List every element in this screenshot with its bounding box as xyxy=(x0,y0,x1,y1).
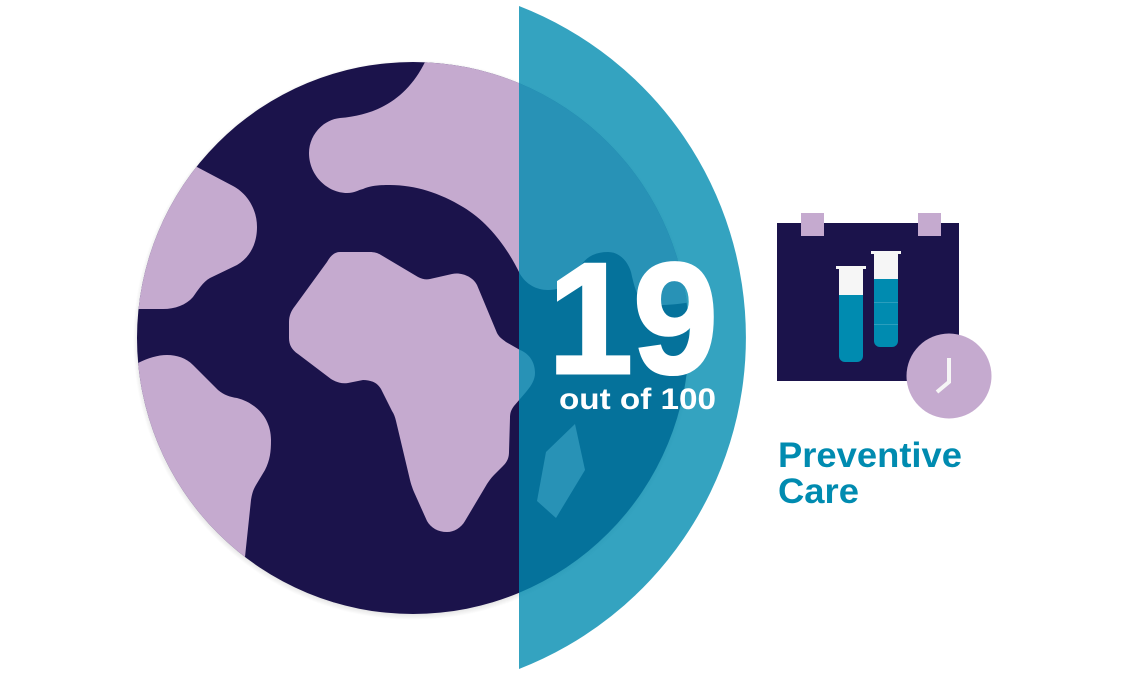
icon: calendar with test tubes and clock xyxy=(777,213,992,418)
continent: northwest xyxy=(138,167,257,309)
continent: madagascar xyxy=(537,424,585,518)
clock xyxy=(906,334,992,418)
continent: southwest xyxy=(138,355,271,557)
continent: africa xyxy=(289,252,535,532)
globe xyxy=(135,62,689,618)
test tube: right xyxy=(871,251,901,347)
label: Preventive Care: Preventive xyxy=(778,435,962,475)
statistic: 19: 19 xyxy=(548,231,718,407)
statistic caption: out of 100: out of 100 xyxy=(559,383,716,416)
label: Preventive Care xyxy=(778,435,962,511)
teal half-disc overlay xyxy=(519,6,746,669)
continent: north xyxy=(309,62,686,305)
label: Preventive Care: Care xyxy=(778,471,859,511)
test tube: left xyxy=(836,266,866,362)
calendar body xyxy=(777,223,959,381)
calendar tabs xyxy=(801,213,941,236)
